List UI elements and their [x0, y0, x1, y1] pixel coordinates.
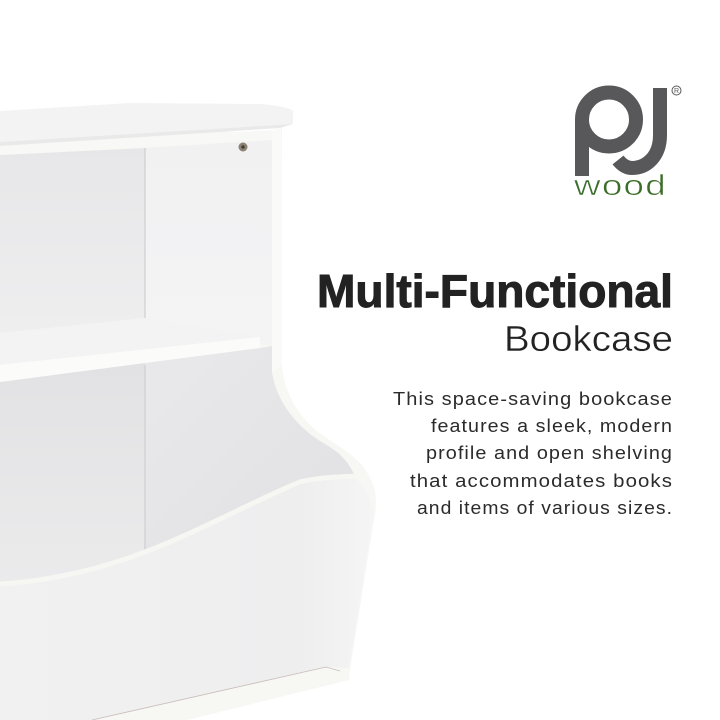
corner line [144, 148, 146, 553]
title: Multi-Functional [317, 265, 673, 317]
bin front panel [0, 478, 373, 720]
logo wordmark: wood [573, 170, 667, 202]
side wall upper [145, 140, 272, 346]
side wall lower [145, 346, 355, 553]
shelf front edge [0, 337, 260, 382]
logo [573, 86, 681, 202]
bin rim [0, 476, 356, 584]
description text: profile and open shelving [426, 442, 673, 463]
description text [393, 388, 673, 518]
back wall lower [0, 362, 145, 585]
subtitle: Bookcase [504, 318, 673, 359]
logo letter p [582, 92, 636, 176]
back wall upper [0, 148, 145, 333]
description text: This space-saving bookcase [393, 388, 673, 409]
logo letter j [618, 88, 660, 168]
description text: and items of various sizes. [417, 497, 673, 518]
description text: features a sleek, modern [431, 415, 673, 436]
top shelf surface [0, 318, 260, 365]
bookcase product photo [0, 103, 376, 720]
side panel trim [0, 128, 376, 720]
screw [238, 142, 248, 152]
top board [0, 103, 293, 142]
top trim [0, 130, 272, 155]
description text: that accommodates books [410, 470, 673, 491]
registered mark: R [674, 88, 679, 95]
bottom seam [92, 667, 340, 720]
